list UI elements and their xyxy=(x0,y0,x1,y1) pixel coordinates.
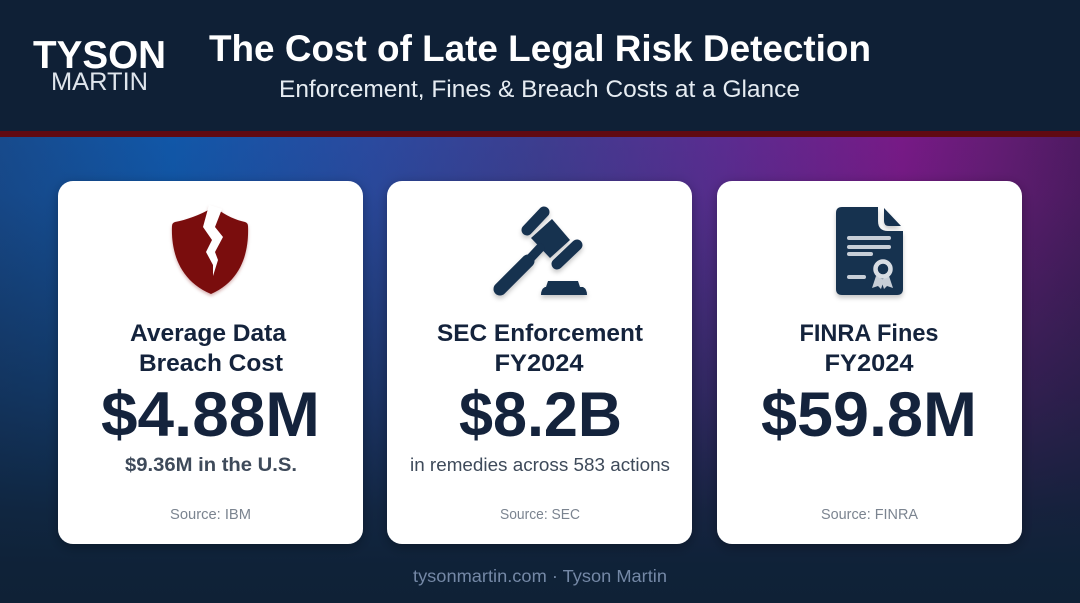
logo: Tyson Martin: TYSON xyxy=(33,34,166,77)
card heading: SEC Enforcement xyxy=(437,320,643,347)
panel: SEC enforcement xyxy=(387,181,692,544)
source: Source: IBM xyxy=(170,506,251,523)
card heading: Breach Cost xyxy=(139,350,283,377)
panel: average data breach cost xyxy=(58,181,363,544)
icon: certificate document xyxy=(836,207,903,295)
card heading: FY2024 xyxy=(824,350,914,377)
card heading xyxy=(130,320,287,377)
header band xyxy=(0,0,1080,132)
detail text: $9.36M in the U.S. xyxy=(125,455,297,476)
logo: Tyson Martin xyxy=(33,34,166,96)
big number: $8.2B xyxy=(459,380,622,450)
footer text: tysonmartin.com · Tyson Martin xyxy=(413,566,667,586)
icon: gavel xyxy=(500,212,587,295)
big number: $4.88M xyxy=(101,380,320,450)
card heading: FY2024 xyxy=(494,350,584,377)
card heading: Average Data xyxy=(130,320,287,347)
title: The Cost of Late Legal Risk Detection xyxy=(209,28,871,69)
subtitle: Enforcement, Fines & Breach Costs at a Glance xyxy=(279,76,800,103)
icon: cracked shield xyxy=(172,205,248,294)
logo: Tyson Martin: MARTIN xyxy=(51,68,148,96)
card heading xyxy=(437,320,643,377)
card heading xyxy=(800,320,938,377)
panel: FINRA fines xyxy=(717,181,1022,544)
detail text: in remedies across 583 actions xyxy=(410,454,670,475)
card heading: FINRA Fines xyxy=(800,320,938,347)
big number: $59.8M xyxy=(761,380,977,450)
background gradient xyxy=(0,137,1080,603)
source: Source: SEC xyxy=(500,506,580,523)
source: Source: FINRA xyxy=(821,506,918,523)
red divider bar xyxy=(0,131,1080,137)
